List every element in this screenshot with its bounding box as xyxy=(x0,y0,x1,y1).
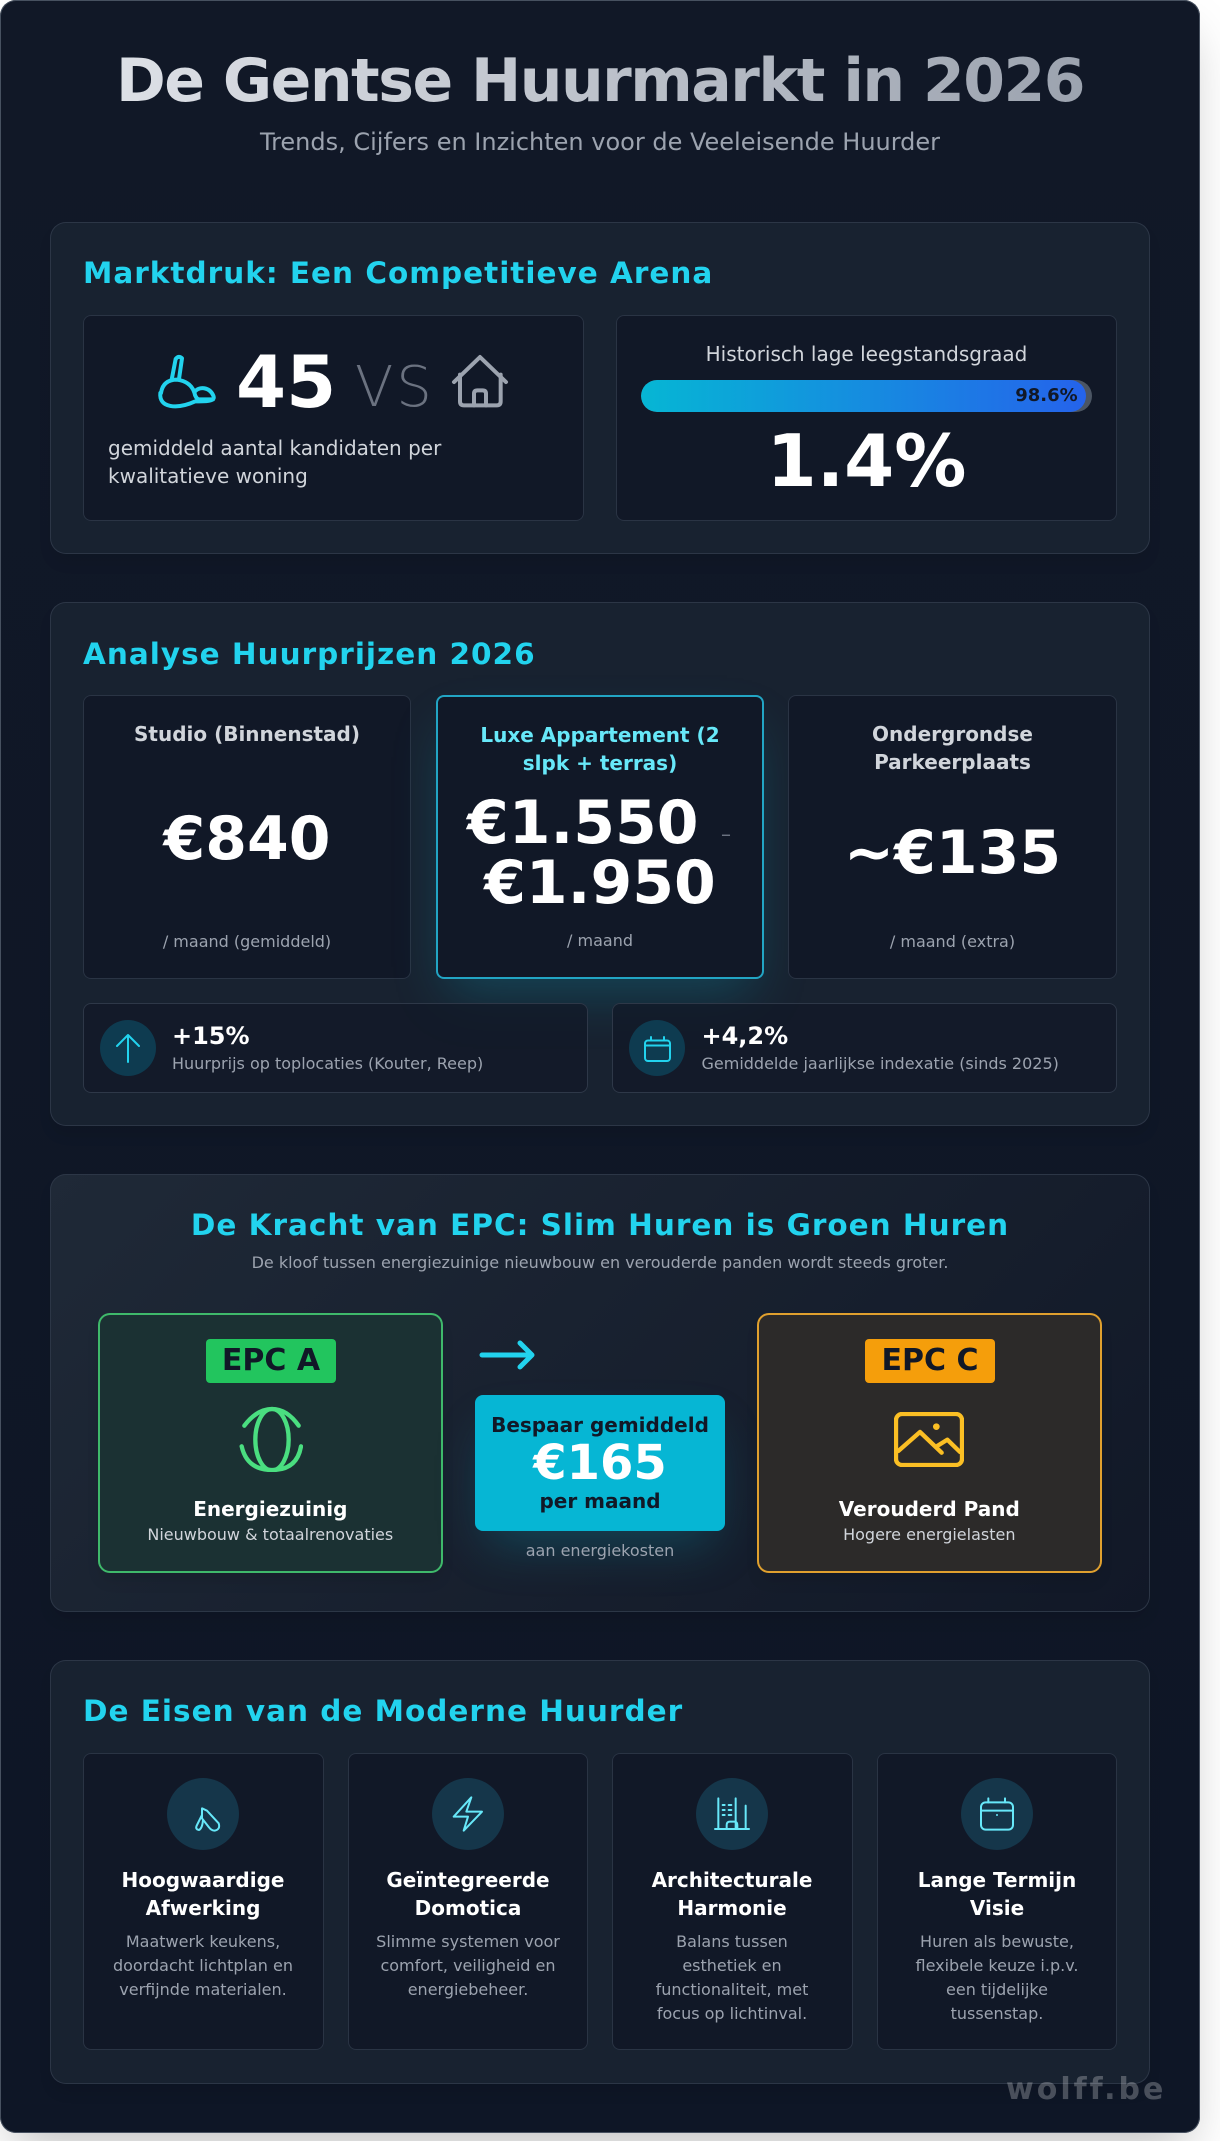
title: Lange Termijn xyxy=(918,1868,1076,1892)
card: leegstand xyxy=(616,315,1117,521)
heading: EPC: De Kracht van EPC: Slim Huren is Groen Huren xyxy=(191,1208,1009,1242)
card title: Studio (Binnenstad) xyxy=(134,722,360,746)
title xyxy=(122,1868,284,1920)
price note: / maand (gemiddeld) xyxy=(163,932,331,950)
icon: calendar xyxy=(629,1020,685,1076)
price: €840 xyxy=(164,804,330,874)
stat: +15% xyxy=(83,1003,588,1093)
arrow xyxy=(480,1340,534,1370)
icon: brush xyxy=(167,1778,239,1850)
icon: arrow up xyxy=(100,1020,156,1076)
title: Visie xyxy=(970,1896,1024,1920)
title: Architecturale xyxy=(652,1868,812,1892)
bar fill 98.6% xyxy=(641,380,1086,412)
heading: huurprijzen: Analyse Huurprijzen 2026 xyxy=(83,636,536,670)
card title: slpk + terras) xyxy=(523,751,677,775)
description: functionaliteit, met xyxy=(656,1980,808,1998)
description: een tijdelijke xyxy=(946,1980,1048,1998)
callout: savings xyxy=(475,1395,725,1531)
card: harmonie xyxy=(612,1753,853,2050)
title: Geïntegreerde xyxy=(386,1868,550,1892)
card: visie xyxy=(877,1753,1117,2050)
card title xyxy=(480,723,720,775)
card: afwerking xyxy=(83,1753,324,2050)
subtitle: Trends, Cijfers en Inzichten voor de Veeleisende Huurder xyxy=(260,128,940,156)
panel: marktdruk xyxy=(50,222,1150,554)
description: doordacht lichtplan en xyxy=(113,1956,293,1974)
card: parkeerplaats xyxy=(788,695,1117,979)
progress bar xyxy=(641,380,1092,412)
caption: aan energiekosten xyxy=(526,1540,674,1560)
icon: image xyxy=(894,1412,964,1467)
card: studio xyxy=(83,695,411,979)
description: Huren als bewuste, xyxy=(920,1932,1074,1950)
card title xyxy=(872,722,1033,774)
card: EPC A xyxy=(98,1313,443,1573)
value: +4,2% xyxy=(702,1022,788,1050)
value: +15% xyxy=(172,1022,250,1050)
title: Domotica xyxy=(415,1896,521,1920)
description: verfijnde materialen. xyxy=(119,1980,287,1998)
heading: eisen: De Eisen van de Moderne Huurder xyxy=(83,1694,683,1728)
panel: EPC xyxy=(50,1174,1150,1612)
title xyxy=(918,1868,1076,1920)
text: Bespaar gemiddeld xyxy=(491,1413,709,1437)
stat: 1.4%: 1.4% xyxy=(767,419,966,503)
text: per maand xyxy=(539,1489,661,1513)
amount: €165 xyxy=(533,1435,667,1491)
label: VS: VS xyxy=(355,355,435,420)
card title: Luxe Appartement (2 xyxy=(480,723,720,747)
price low: €1.550 xyxy=(467,788,699,858)
watermark: wolff.be xyxy=(1006,2072,1166,2107)
description xyxy=(376,1932,560,1998)
card: luxe appartement xyxy=(436,695,764,979)
price note: / maand (extra) xyxy=(890,932,1015,950)
description: Slimme systemen voor xyxy=(376,1932,560,1950)
description: focus op lichtinval. xyxy=(657,2004,807,2022)
title: Hoogwaardige xyxy=(122,1868,284,1892)
stat: 45: 45 xyxy=(236,340,336,424)
title xyxy=(652,1868,812,1920)
heading: marktdruk: Marktdruk: Een Competitieve Arena xyxy=(83,256,713,290)
subheading: De kloof tussen energiezuinige nieuwbouw en verouderde panden wordt steeds groter. xyxy=(252,1252,948,1272)
card title: Ondergrondse xyxy=(872,722,1033,746)
badge: EPC C xyxy=(865,1339,995,1383)
text: kandidaten xyxy=(108,436,442,488)
description: energiebeheer. xyxy=(408,1980,528,1998)
stat: +4,2% xyxy=(612,1003,1117,1093)
label: leegstandsgraad: Historisch lage leegstandsgraad xyxy=(706,342,1027,366)
description: tussenstap. xyxy=(951,2004,1043,2022)
title xyxy=(386,1868,550,1920)
title: De Gentse Huurmarkt in 2026 xyxy=(116,46,1084,116)
title: Harmonie xyxy=(677,1896,787,1920)
description xyxy=(656,1932,808,2022)
badge: EPC A xyxy=(206,1339,336,1383)
bar fill 98.6%: 98.6% xyxy=(1015,385,1078,406)
icon: bolt xyxy=(432,1778,504,1850)
icon: house xyxy=(452,354,508,408)
badge: EPC A: EPC A xyxy=(222,1343,320,1378)
text: Hogere energielasten xyxy=(843,1524,1015,1544)
text: kandidaten: kwalitatieve woning xyxy=(108,464,308,488)
description: Gemiddelde jaarlijkse indexatie (sinds 2025) xyxy=(702,1054,1059,1072)
description: esthetiek en xyxy=(682,1956,782,1974)
description: flexibele keuze i.p.v. xyxy=(915,1956,1079,1974)
icon: calendar xyxy=(961,1778,1033,1850)
price: ~€135 xyxy=(844,818,1061,888)
title: Afwerking xyxy=(146,1896,260,1920)
card title: Parkeerplaats xyxy=(874,750,1031,774)
description xyxy=(113,1932,293,1998)
description: Huurprijs op toplocaties (Kouter, Reep) xyxy=(172,1054,483,1072)
card: kandidaten vs woning xyxy=(83,315,584,521)
panel: huurprijzen xyxy=(50,602,1150,1126)
description xyxy=(915,1932,1079,2022)
icon: building xyxy=(696,1778,768,1850)
price note: / maand xyxy=(567,930,633,950)
panel: eisen xyxy=(50,1660,1150,2084)
card: EPC C xyxy=(757,1313,1102,1573)
card: domotica xyxy=(348,1753,588,2050)
icon: candidates xyxy=(158,354,216,408)
description: Maatwerk keukens, xyxy=(126,1932,280,1950)
dash: – xyxy=(721,822,731,846)
text: Nieuwbouw & totaalrenovaties xyxy=(147,1524,393,1544)
text: kandidaten: gemiddeld aantal kandidaten per xyxy=(108,436,441,460)
icon: globe xyxy=(240,1406,303,1472)
description: Balans tussen xyxy=(676,1932,788,1950)
title: Verouderd Pand xyxy=(839,1497,1020,1521)
description: comfort, veiligheid en xyxy=(380,1956,556,1974)
title: Energiezuinig xyxy=(193,1497,347,1521)
price high: €1.950 xyxy=(484,848,716,918)
badge: EPC C: EPC C xyxy=(882,1343,978,1378)
